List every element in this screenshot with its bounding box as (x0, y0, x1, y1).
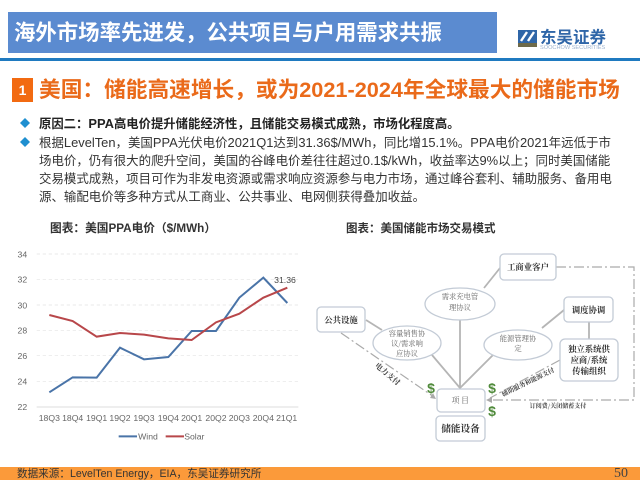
logo: Soochow Securities (518, 24, 606, 51)
logo: Soochow Securities: SOOCHOW SECURITIES (540, 45, 605, 51)
line chart: PPA price: 24 (18, 377, 27, 387)
line chart: PPA price: 34 (18, 249, 27, 259)
header rule (0, 58, 640, 61)
line chart: PPA price: 26 (18, 351, 27, 361)
section heading: 美国：储能高速增长，或为2021-2024年全球最大的储能市场 (39, 77, 620, 102)
diagram: US storage market transactions: $ (427, 380, 435, 396)
line chart: PPA price: Wind (138, 432, 158, 442)
diagram: US storage market transactions: 定 (514, 344, 522, 354)
footer bar (0, 467, 640, 480)
bullet 2 text: 源、输配电价等多种方式从工商业、公共事业、电网侧获得叠加收益。 (39, 190, 425, 204)
diagram: US storage market transactions: 储能设备 (441, 421, 480, 435)
line chart: PPA price: 18Q3 (39, 413, 60, 423)
line chart: PPA price (18, 249, 298, 442)
line chart: PPA price: 18Q4 (62, 413, 83, 423)
diagram: US storage market transactions: 容量销售协 (389, 329, 426, 339)
bullet 2 text: 交易模式成熟，项目可作为非发电资源或需求响应资源参与电力市场，通过峰谷套利、辅助服务、备用电 (39, 172, 612, 186)
diagram: US storage market transactions: 应协议 (396, 349, 419, 359)
line chart: PPA price: 31.36 (274, 275, 296, 285)
section number badge (12, 78, 33, 102)
diagram: US storage market transactions: $ (488, 380, 496, 396)
line chart: PPA price: 19Q4 (158, 413, 179, 423)
chart title right: 图表：美国储能市场交易模式 (346, 223, 496, 235)
bullet 2 text: 场电价，仍有很大的爬升空间，美国的谷峰电价差往往超过0.1$/kWh，收益率达9%以上；同时美国储能 (39, 153, 610, 168)
diagram: US storage market transactions: 订阅费/关闭储蓄支付 (530, 401, 586, 410)
line chart: PPA price: 19Q1 (86, 413, 107, 423)
diagram: US storage market transactions: 项目 (452, 395, 470, 406)
diagram: US storage market transactions: 需求充电管 (442, 292, 478, 302)
diagram: US storage market transactions: 电力支付 (373, 360, 403, 388)
diagram: US storage market transactions: 辅助服务和能源支付 (500, 365, 556, 398)
diagram: US storage market transactions: 能源管理协 (500, 334, 537, 344)
line chart: PPA price: 30 (18, 300, 27, 310)
line chart: PPA price: 20Q4 (253, 413, 274, 423)
diagram: US storage market transactions: 传输组织 (572, 365, 607, 377)
line chart: PPA price: 20Q1 (181, 413, 202, 423)
diagram: US storage market transactions: 独立系统供 (568, 343, 611, 355)
logo: Soochow Securities: 东吴证券 (540, 24, 606, 48)
line chart: PPA price: 20Q3 (229, 413, 250, 423)
diagram: US storage market transactions: $ (488, 403, 496, 419)
bullet 1 text: 原因二：PPA高电价提升储能经济性，且储能交易模式成熟，市场化程度高。 (39, 116, 460, 131)
bullet 2 text: 根据LevelTen，美国PPA光伏电价2021Q1达到31.36$/MWh，同比增15.1%。PPA电价2021年远低于市 (39, 135, 611, 150)
diagram: US storage market transactions: 工商业客户 (507, 261, 549, 273)
bullet icons (20, 118, 30, 147)
diagram: US storage market transactions: 应商/系统 (571, 354, 608, 366)
header banner (8, 12, 497, 53)
line chart: PPA price: 22 (18, 402, 27, 412)
bullet 2 text (39, 135, 612, 204)
line chart: PPA price: 19Q3 (133, 413, 155, 423)
diagram: US storage market transactions: 公共设施 (324, 314, 358, 326)
diagram: US storage market transactions: 调度协调 (572, 304, 606, 316)
line chart: PPA price: 19Q2 (109, 413, 131, 423)
line chart: PPA price: 32 (18, 275, 27, 285)
footer source: 数据来源：LevelTen Energy，EIA，东吴证券研究所 (17, 468, 261, 480)
diagram: US storage market transactions: 理协议 (449, 303, 472, 313)
title: 海外市场率先进发，公共项目与户用需求共振 (14, 16, 442, 47)
line chart: PPA price: 28 (18, 326, 27, 336)
chart title left: 图表：美国PPA电价（$/MWh） (50, 222, 216, 235)
line chart: PPA price: 21Q1 (276, 413, 297, 423)
diagram: US storage market transactions (316, 253, 635, 442)
line chart: PPA price: Solar (184, 432, 205, 442)
section number badge: 1 (19, 82, 26, 98)
diagram: US storage market transactions: 议/需求响 (391, 339, 423, 349)
line chart: PPA price: 20Q2 (205, 413, 227, 423)
